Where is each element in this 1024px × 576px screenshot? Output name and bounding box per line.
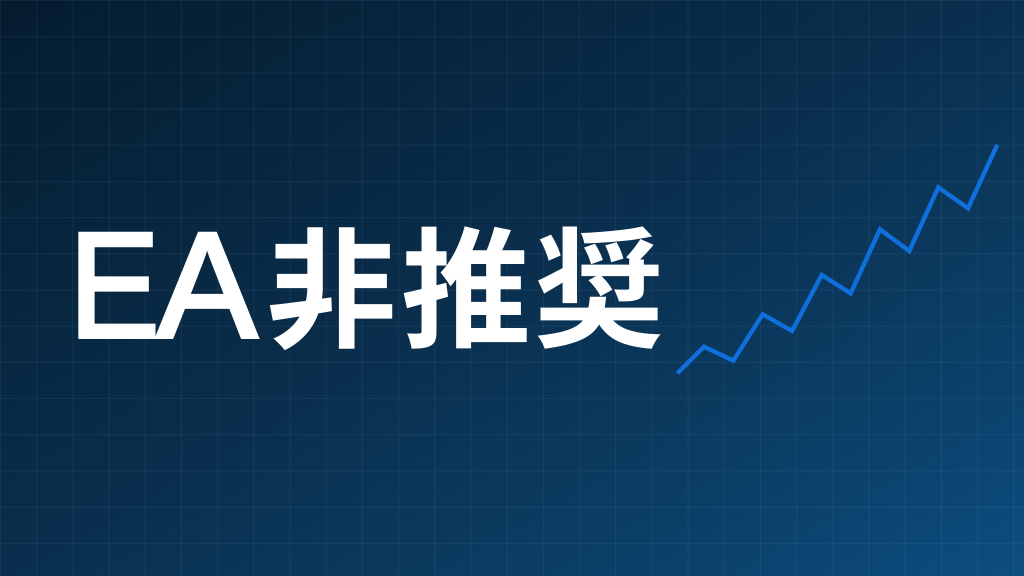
title [69,186,664,374]
title: 推 [401,186,531,374]
title: 非 [266,186,397,374]
title: E [69,201,159,369]
title: 奨 [534,186,664,374]
title: A [157,201,257,369]
